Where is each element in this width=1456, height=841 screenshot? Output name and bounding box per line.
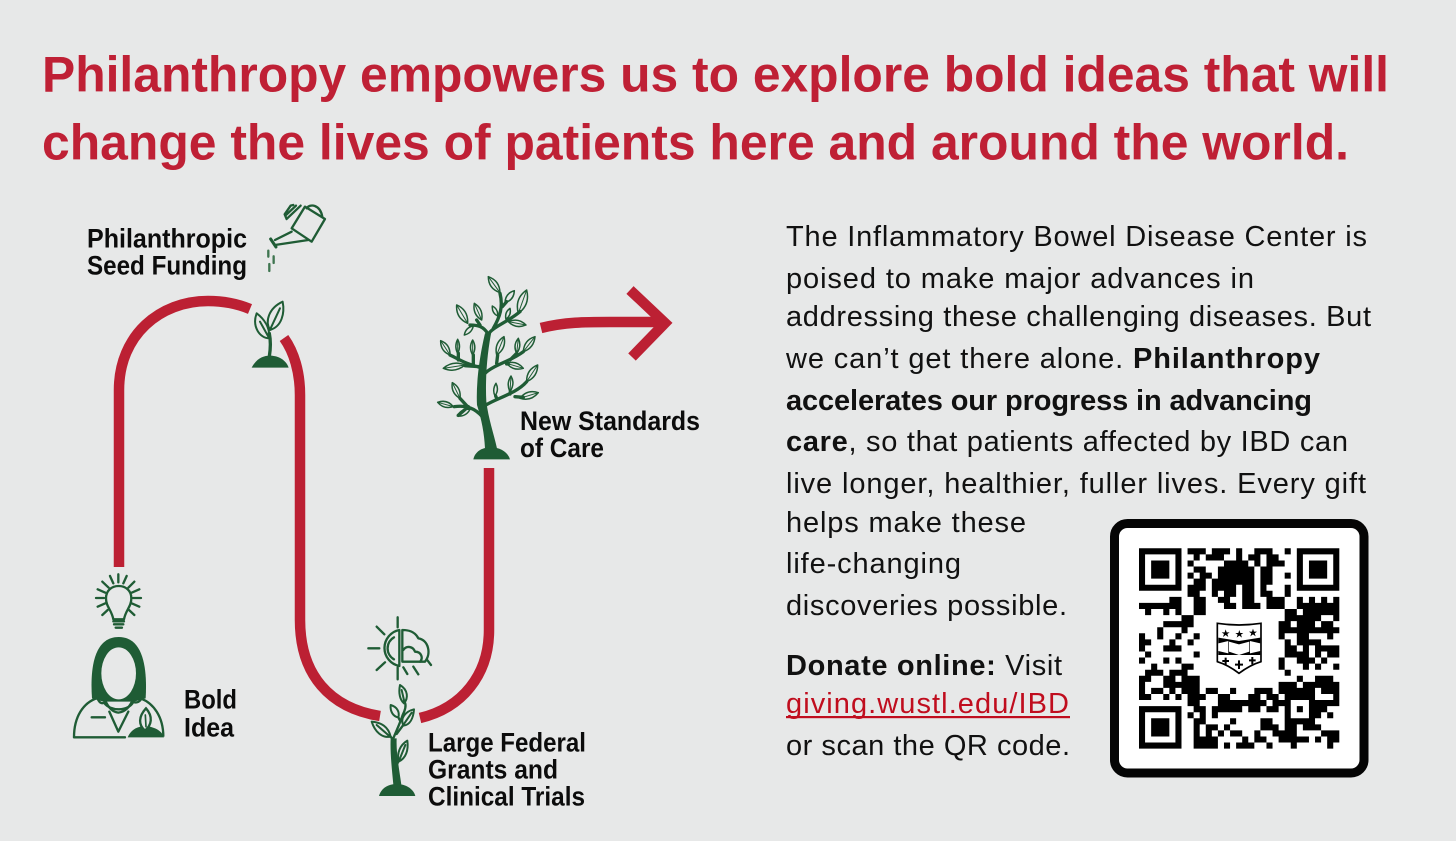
text block: description: addressing these challenging diseases. But (786, 301, 1371, 333)
text block: donate online: or scan the QR code. (786, 730, 1070, 762)
label: bold idea (184, 684, 237, 742)
label: bold idea: Idea (184, 712, 235, 742)
text block: donate online (786, 650, 1070, 762)
text block: description: poised to make major advances in (786, 263, 1254, 295)
label: large federal grants and clinical trials (428, 728, 586, 812)
text block: donate online: Donate online: Visit (786, 650, 1062, 682)
icon: mature tree (438, 277, 538, 459)
text block: description: accelerates our progress in advancing (786, 385, 1312, 417)
icon: seedling (252, 302, 289, 368)
icon: light bulb (96, 574, 141, 628)
text block: description: care, so that patients affected by IBD can (786, 426, 1348, 458)
pathway arrow (119, 290, 665, 718)
label: bold idea: Bold (184, 684, 237, 714)
text block: description: we can’t get there alone. Philanthropy (785, 343, 1320, 375)
title: Philanthropy empowers us to explore bold ideas that will (42, 46, 1389, 102)
label: philanthropic seed funding (87, 224, 247, 280)
label: large federal grants and clinical trials: Large Federal (428, 728, 586, 758)
label: new standards of care (520, 406, 700, 463)
label: philanthropic seed funding: Seed Funding (87, 250, 247, 280)
title: change the lives of patients here and around the world. (42, 114, 1349, 170)
text block: donate online: giving.wustl.edu/IBD (786, 688, 1069, 720)
label: large federal grants and clinical trials: Clinical Trials (428, 782, 585, 812)
text block: description: life-changing (786, 548, 961, 580)
icon: watering can (268, 205, 325, 271)
text block: description (785, 221, 1371, 622)
label: new standards of care: New Standards (520, 406, 700, 436)
icon: sun and cloud (368, 617, 431, 679)
icon: clinician with sprout (74, 637, 164, 737)
text block: description: discoveries possible. (786, 590, 1067, 622)
text block: description: The Inflammatory Bowel Disease Center is (786, 221, 1367, 253)
label: large federal grants and clinical trials: Grants and (428, 754, 558, 784)
label: philanthropic seed funding: Philanthropic (87, 224, 247, 254)
text block: description: helps make these (786, 507, 1026, 539)
QR code (1114, 524, 1364, 773)
label: new standards of care: of Care (520, 433, 604, 463)
QR crest (1217, 623, 1261, 673)
text block: description: live longer, healthier, fuller lives. Every gift (786, 468, 1366, 500)
title (42, 46, 1389, 170)
icon: young plant (372, 685, 415, 796)
